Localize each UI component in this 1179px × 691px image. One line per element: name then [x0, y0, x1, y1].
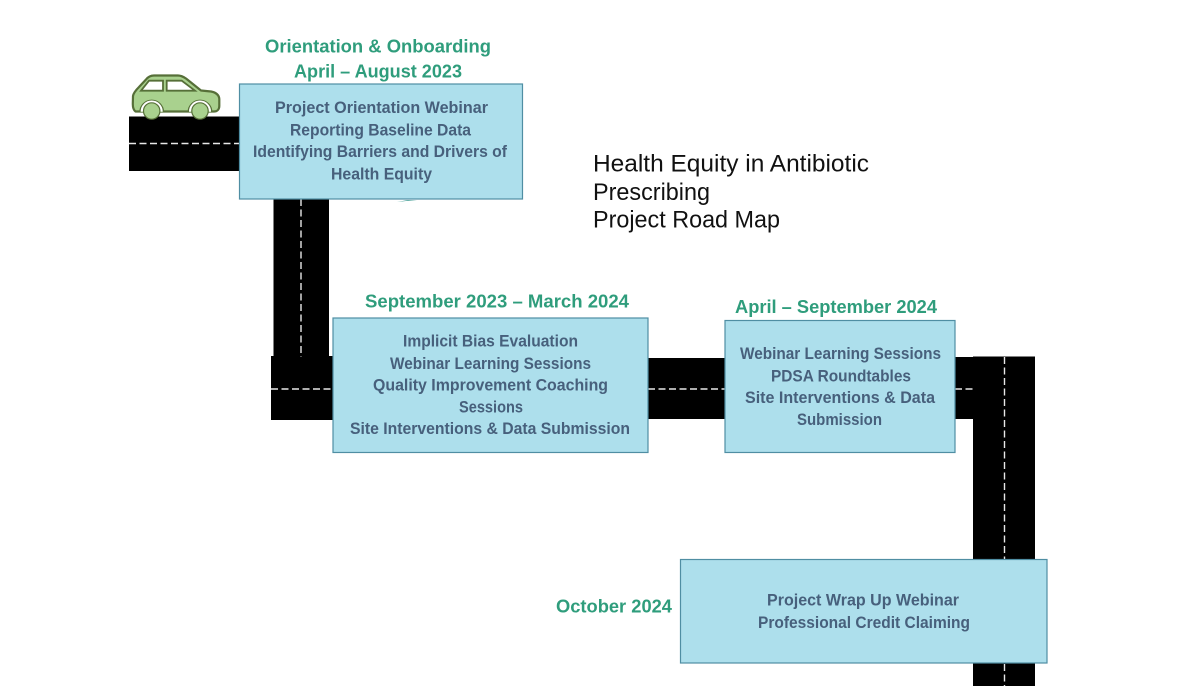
panel: orientation activities: Identifying Barriers and Drivers of — [253, 143, 507, 161]
panel: september to march activities — [333, 318, 648, 452]
title: Health Equity in Antibiotic — [593, 151, 869, 178]
icon: car — [133, 76, 219, 119]
panel: april to september activities — [725, 320, 955, 452]
panel: september to march activities: Site Interventions & Data Submission — [350, 420, 630, 438]
panel: september to march activities: Sessions — [459, 398, 523, 416]
heading: october 2024: October 2024 — [556, 596, 673, 616]
panel: orientation activities: Health Equity — [331, 166, 433, 184]
title — [593, 151, 869, 234]
heading: september 2023 to march 2024: September 2023 – March 2024 — [365, 290, 630, 312]
panel: september to march activities: Implicit Bias Evaluation — [403, 332, 578, 350]
road network — [129, 116, 1035, 686]
panel: september to march activities: Quality Improvement Coaching — [373, 376, 608, 394]
panel: september to march activities: Webinar Learning Sessions — [390, 355, 591, 373]
heading: orientation and onboarding dates — [265, 36, 491, 82]
heading: orientation and onboarding dates: Orientation & Onboarding — [265, 36, 491, 56]
panel: wrap up activities: Professional Credit Claiming — [758, 614, 970, 632]
title: Project Road Map — [593, 207, 780, 234]
panel: wrap up activities — [680, 560, 1047, 663]
panel: orientation activities — [240, 84, 522, 199]
panel: april to september activities: Webinar Learning Sessions — [740, 345, 941, 363]
panel: april to september activities: Site Interventions & Data — [745, 389, 936, 407]
panel: april to september activities: PDSA Roundtables — [771, 368, 911, 386]
heading: april to september 2024: April – September 2024 — [735, 296, 938, 317]
title: Prescribing — [593, 179, 710, 206]
panel: april to september activities: Submission — [797, 411, 882, 429]
heading: orientation and onboarding dates: April – August 2023 — [294, 60, 462, 82]
panel: wrap up activities: Project Wrap Up Webinar — [767, 592, 960, 610]
panel: orientation activities: Project Orientation Webinar — [275, 99, 489, 117]
panel: orientation activities: Reporting Baseline Data — [290, 122, 472, 140]
small teal mark — [397, 200, 417, 202]
